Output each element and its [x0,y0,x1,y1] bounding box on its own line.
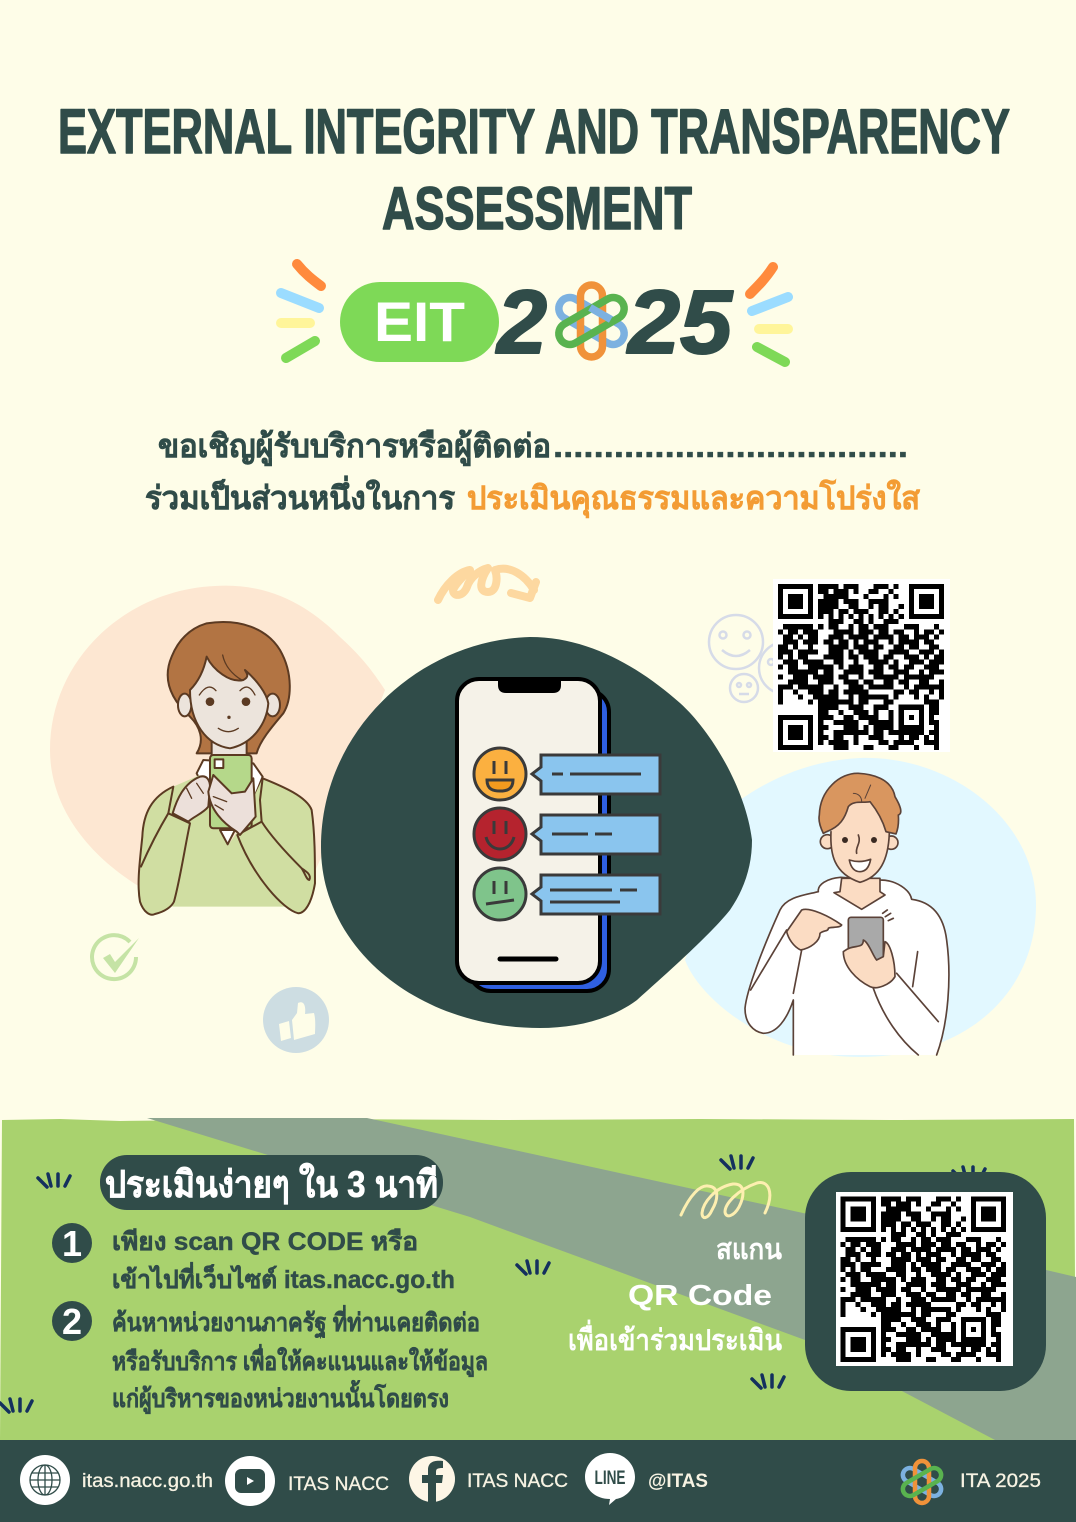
phone back [469,690,609,991]
invitation text: ร่วมเป็นส่วนหนึ่งในการ [145,475,455,516]
scan QR text: สแกน [716,1234,782,1266]
step 2: ค้นหาหน่วยงานภาครัฐ ที่ท่านเคยติดต่อ [112,1305,480,1339]
collar [197,760,263,800]
nose [856,835,859,853]
phone front [457,679,600,983]
illustration: dark central blob [321,637,752,1028]
hoodie outline [745,877,949,1055]
decorative rays left [281,264,321,358]
holding hand [843,940,895,988]
diagonal grey stripe [147,1118,1076,1440]
EIT pill: EIT [374,290,465,353]
QR code upper [773,579,950,752]
face: smile [474,808,526,860]
sweater [141,775,315,907]
scan QR text: QR Code [628,1280,772,1312]
footer: website: itas.nacc.go.th [82,1471,213,1492]
hair [168,622,290,753]
icon: smileys [709,615,811,702]
signal lines [883,910,893,921]
left sleeve crease [141,813,168,867]
footer bar [0,1440,1076,1522]
invitation text: ประเมินคุณธรรมและความโปร่งใส [467,479,920,519]
invitation text: ขอเชิญผู้รับบริการหรือผู้ติดต่อ [158,428,551,467]
icon: check mark [92,935,139,979]
title: ASSESSMENT [382,175,692,242]
ears [178,694,280,716]
step 1: เข้าไปที่เว็บไซต์ itas.nacc.go.th [112,1262,455,1294]
shirt tip [220,830,235,844]
illustration: phone with feedback [457,679,660,991]
mouth [849,859,871,872]
step 1: เพียง scan QR CODE หรือ [112,1228,418,1256]
icon: YouTube [225,1456,275,1506]
knot emblem [555,285,628,357]
icon: LINE: LINE [594,1468,626,1489]
illustration: left peach blob [50,586,385,905]
step 2: หรือรับบริการ เพื่อให้คะแนนและให้ข้อมูล [112,1344,488,1378]
step 1 [52,1223,455,1294]
invitation text: ................................... [553,428,908,464]
heading: assess in 3 minutes: ประเมินง่ายๆ ใน 3 นาที [105,1162,438,1205]
right hand [208,775,256,835]
facial features [199,655,255,732]
hair parting [853,785,871,802]
footer: Facebook name: ITAS NACC [467,1471,568,1492]
step 2: แก่ผู้บริหารของหน่วยงานนั้นโดยตรง [112,1379,449,1415]
icon: Facebook [409,1456,455,1502]
feedback bubble 2 [532,815,660,854]
footer: ITA 2025: ITA 2025 [960,1471,1041,1492]
face: happy [474,748,526,800]
left hand [173,776,210,822]
face [190,657,268,748]
title [58,97,1010,242]
ears [820,835,898,849]
EIT pill [340,282,499,362]
hoodie fill [745,877,949,1055]
year digit 2: 2 [495,273,547,373]
year digits 25: 25 [626,273,734,373]
step 1: 1 [62,1223,82,1264]
face outline [831,832,889,882]
decorative rays right [750,267,788,362]
home bar [500,956,556,962]
eyes [842,837,877,843]
face: neutral [474,868,526,920]
right sleeve [237,778,315,913]
finger lines [187,783,227,810]
illustration: woman holding phone [139,622,315,915]
footer: YouTube name: ITAS NACC [288,1474,389,1495]
scan QR text [568,1234,782,1357]
feedback bubble 3 [532,875,660,914]
icon: thumbs up [263,987,329,1053]
left sleeve [139,787,190,915]
illustration: right blue blob [685,758,1036,1057]
notch [498,679,561,693]
step 2 [52,1301,488,1415]
scan QR text: เพื่อเข้าร่วมประเมิน [568,1319,782,1357]
neck [212,740,247,760]
icon: globe [20,1455,70,1505]
step 2: 2 [62,1301,82,1342]
arrow: loop [438,568,536,600]
feedback bubble 1 [532,755,660,794]
neck [834,878,885,909]
squiggle [681,1183,770,1218]
hoodie lines [751,930,938,1055]
panel: green band [0,1119,1076,1440]
right sleeve crease [262,822,310,880]
icon: ITA knot [900,1461,944,1503]
invitation text [145,428,920,519]
hair [819,773,901,834]
illustration: man pointing at phone [745,773,949,1055]
icon: LINE [585,1453,635,1505]
footer: LINE id: @ITAS [648,1471,708,1492]
pointing hand [787,909,842,950]
eyes and nose [206,697,250,719]
QR code lower [805,1172,1046,1391]
heading: assess in 3 minutes [100,1155,443,1210]
handset [848,917,883,966]
EIT 2025 logo [281,264,788,373]
face [831,793,889,882]
phone [210,755,252,828]
tick marks [0,1156,985,1412]
